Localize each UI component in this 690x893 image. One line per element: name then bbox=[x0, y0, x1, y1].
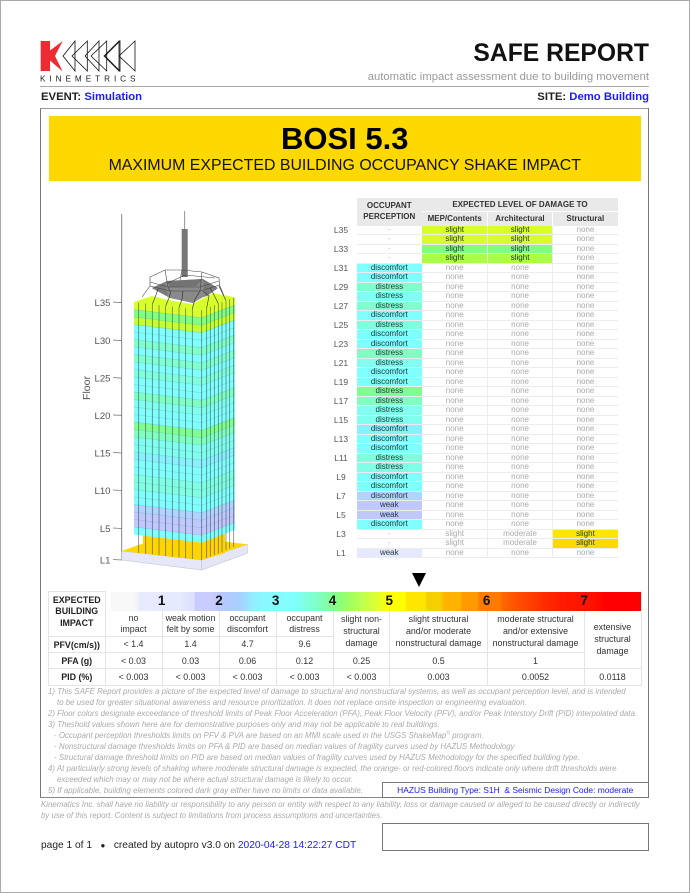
impact table grid lines bbox=[48, 591, 642, 686]
floor labels: L31 bbox=[334, 263, 348, 273]
HAZUS building type box bbox=[382, 782, 649, 798]
disclaimer: Kinematics Inc. shall have no liability or responsibility to any person or entity with respect to any liability, loss or damage caused or alleged to be caused directly or indirectly bbox=[41, 800, 640, 809]
floor labels: L25 bbox=[334, 320, 348, 330]
floor labels: L19 bbox=[334, 377, 348, 387]
impact descriptions: structural bbox=[594, 634, 631, 644]
footnotes bbox=[48, 686, 637, 794]
impact descriptions: occupant bbox=[229, 612, 266, 622]
impact values: PFA: < 0.03 bbox=[121, 656, 146, 666]
impact values: PFV: 1.4 bbox=[184, 639, 197, 649]
floor labels: L13 bbox=[334, 434, 348, 444]
event label: EVENT: Simulation bbox=[41, 91, 142, 103]
floor labels: L21 bbox=[334, 358, 348, 368]
plinth bbox=[122, 530, 247, 570]
floor labels: L35 bbox=[334, 225, 348, 235]
impact descriptions: and/or extensive bbox=[503, 626, 568, 636]
impact descriptions: extensive bbox=[594, 622, 631, 632]
impact values: PID: < 0.003 bbox=[290, 672, 319, 682]
architectural header bbox=[488, 212, 552, 226]
logo: Kinematics: KINEMETRICS bbox=[40, 74, 136, 84]
floor axis bbox=[81, 214, 122, 566]
tower faces bbox=[134, 293, 235, 543]
impact level numbers: 2 bbox=[215, 593, 223, 608]
floor labels: L17 bbox=[334, 396, 348, 406]
floor axis: L20 bbox=[94, 411, 110, 422]
impact level numbers: 7 bbox=[581, 593, 588, 608]
impact values: PFA: 0.25 bbox=[353, 656, 370, 666]
footnotes: - Structural damage threshold limits on PID are based on median values of fragility curves used by HAZUS Methodology for the specified building type. bbox=[54, 752, 580, 762]
floor axis: Floor bbox=[81, 376, 93, 400]
impact level numbers: 4 bbox=[329, 593, 336, 608]
footnotes: - Occupant perception thresholds limits on PFV & PVA are based on an MMI scale used in the USGS ShakeMap© program. bbox=[54, 730, 484, 740]
impact row headings: PFV(cm/s)) bbox=[54, 640, 100, 650]
floor labels: L11 bbox=[334, 453, 348, 463]
impact row headings: BUILDING bbox=[55, 606, 98, 616]
impact values: PID: < 0.003 bbox=[119, 672, 148, 682]
empty signature box bbox=[382, 822, 649, 851]
building 3D chart bbox=[81, 211, 248, 570]
tower columns bbox=[139, 298, 234, 560]
impact values: PID: 0.003 bbox=[427, 672, 450, 682]
impact values: PFV: 9.6 bbox=[298, 639, 311, 649]
footnotes: 2) Floor colors designate exceedance of threshold limits of Peak Floor Acceleration (PFA), Peak Floor Velocity (PFV), and/or Peak Interstory Drift (PID) interpolated data. bbox=[48, 708, 637, 718]
subtitle: automatic impact assessment due to building movement bbox=[368, 71, 649, 83]
disclaimer bbox=[41, 800, 640, 820]
title: SAFE REPORT: SAFE REPORT bbox=[473, 40, 649, 67]
floor axis: L1 bbox=[100, 556, 110, 566]
text: 5) If applicable, building elements colored dark gray either have no limits or data available. bbox=[48, 786, 363, 794]
impact values: PID: < 0.003 bbox=[176, 672, 205, 682]
impact values: PFA: 0.12 bbox=[296, 656, 313, 666]
occupant perception header: PERCEPTION bbox=[363, 212, 415, 221]
impact row headings: EXPECTED bbox=[53, 594, 101, 604]
banner subheading: MAXIMUM EXPECTED BUILDING OCCUPANCY SHAKE IMPACT bbox=[109, 157, 581, 174]
impact level numbers: 5 bbox=[386, 593, 393, 608]
impact level numbers: 1 bbox=[158, 593, 165, 608]
impact values: PFA: 0.06 bbox=[239, 656, 256, 666]
roof wireframe bbox=[142, 270, 224, 297]
damage table header bbox=[357, 198, 618, 226]
floor labels: L1 bbox=[336, 548, 346, 558]
impact values: PFA: 1 bbox=[533, 656, 538, 666]
roof column tops bbox=[152, 286, 226, 309]
floor axis: L30 bbox=[94, 336, 110, 347]
impact descriptions: structural bbox=[343, 626, 380, 636]
impact row headings: PFA (g) bbox=[61, 656, 92, 666]
impact values: PID: < 0.003 bbox=[347, 672, 376, 682]
impact values: PID: < 0.003 bbox=[233, 672, 262, 682]
floor labels bbox=[334, 225, 348, 558]
impact descriptions: discomfort bbox=[227, 624, 268, 634]
MEP header: MEP/Contents bbox=[428, 214, 482, 223]
impact values: PFA bbox=[121, 656, 538, 666]
impact descriptions: nonstructural damage bbox=[396, 638, 481, 648]
footnotes: - Nonstructural damage thresholds limits on PFA & PID are based on median values of fragility curves used by HAZUS Methodology bbox=[54, 742, 514, 750]
disclaimer: by use of this report. Content is subject to limitations from process assumptions and uncertainties. bbox=[41, 811, 382, 820]
impact values: PFA: 0.03 bbox=[182, 656, 199, 666]
header rule bbox=[40, 86, 649, 87]
floor labels: L3 bbox=[336, 529, 346, 539]
impact descriptions: felt by some bbox=[167, 624, 214, 634]
floor labels: L27 bbox=[334, 301, 348, 311]
impact descriptions: no bbox=[129, 612, 138, 622]
impact descriptions: and/or moderate bbox=[406, 626, 471, 636]
impact values: PFV bbox=[124, 639, 311, 649]
impact values: PID: 0.0052 bbox=[522, 672, 549, 682]
footnotes: 3) Theshold values shown here are for demonstrative purposes only and may not be applicable to real buildings. bbox=[48, 720, 440, 728]
impact descriptions bbox=[120, 612, 631, 656]
floor axis: L15 bbox=[94, 448, 110, 460]
impact level numbers bbox=[158, 593, 588, 608]
impact level numbers: 6 bbox=[483, 593, 490, 608]
impact descriptions: occupant bbox=[286, 612, 323, 622]
logo: Kinematics bbox=[40, 40, 136, 84]
architectural header: Architectural bbox=[495, 214, 545, 223]
occupant perception header bbox=[357, 198, 422, 226]
floor axis: L25 bbox=[94, 374, 110, 384]
footnotes: 4) At particularly strong levels of shaking where moderate structural damage is expected, the orange- or red-colored floors indicate only where drift thresholds were bbox=[48, 764, 617, 772]
floor labels: L7 bbox=[336, 491, 346, 501]
main panel frame bbox=[40, 108, 649, 798]
floor labels: L15 bbox=[334, 415, 348, 425]
footnotes: to be used for greater situational awareness and resource prioritization. It does not replace onsite inspection or engineering evaluation. bbox=[57, 698, 527, 706]
damage table grid bbox=[357, 226, 618, 558]
banner heading: BOSI 5.3 bbox=[281, 121, 408, 156]
arrow: current impact marker bbox=[412, 573, 426, 587]
impact descriptions: slight non- bbox=[341, 614, 382, 624]
floor axis: L10 bbox=[94, 486, 110, 497]
floor axis: L5 bbox=[100, 524, 110, 535]
impact row headings bbox=[53, 594, 101, 682]
impact values: PFV: < 1.4 bbox=[124, 639, 144, 649]
site label: SITE: Demo Building bbox=[537, 91, 649, 103]
impact descriptions: damage bbox=[596, 646, 629, 656]
footer: page and creation info: page 1 of 1 ● created by autopro v3.0 on 2020-04-28 14:22:27 CDT bbox=[41, 840, 356, 850]
impact descriptions: damage bbox=[345, 638, 378, 648]
HAZUS building type box: HAZUS Building Type: S1H & Seismic Design Code: moderate bbox=[397, 784, 633, 794]
impact level numbers: 3 bbox=[272, 593, 279, 608]
impact values: PFV: 4.7 bbox=[241, 639, 254, 649]
banner bbox=[48, 116, 641, 181]
floor labels: L23 bbox=[334, 339, 348, 349]
impact descriptions: impact bbox=[120, 624, 147, 634]
expected damage header: EXPECTED LEVEL OF DAMAGE TO bbox=[452, 200, 588, 209]
structural header: Structural bbox=[566, 214, 604, 223]
impact descriptions: nonstructural damage bbox=[493, 638, 578, 648]
impact values: PID bbox=[119, 672, 626, 682]
roof mechanical block bbox=[152, 279, 218, 303]
impact descriptions: slight structural bbox=[409, 614, 468, 624]
floor labels: L33 bbox=[334, 244, 348, 254]
impact descriptions: weak motion bbox=[166, 612, 215, 622]
occupant perception header: OCCUPANT bbox=[367, 201, 412, 210]
impact row headings: IMPACT bbox=[60, 618, 93, 628]
impact descriptions: moderate structural bbox=[497, 614, 574, 624]
floor labels: L29 bbox=[334, 282, 348, 292]
floor labels: L9 bbox=[336, 472, 346, 482]
spire bbox=[182, 211, 188, 277]
impact descriptions: distress bbox=[289, 624, 320, 634]
impact values: PFA: 0.5 bbox=[432, 656, 445, 666]
impact row headings: PID (%) bbox=[61, 672, 92, 682]
footnotes: exceeded which may or may not be where actual structural damage is likely to occur. bbox=[57, 774, 353, 784]
footnotes: 1) This SAFE Report provides a picture of the expected level of damage to structural and nonstructural systems, as well as occupant perception level, and is intended bbox=[48, 686, 626, 696]
floor labels: L5 bbox=[336, 510, 346, 520]
expected damage header bbox=[422, 198, 618, 211]
structural header bbox=[553, 212, 618, 226]
impact gradient bar bbox=[105, 592, 641, 611]
floor axis: L35 bbox=[94, 298, 110, 309]
MEP header bbox=[422, 212, 487, 226]
impact values: PID: 0.0118 bbox=[599, 672, 626, 682]
